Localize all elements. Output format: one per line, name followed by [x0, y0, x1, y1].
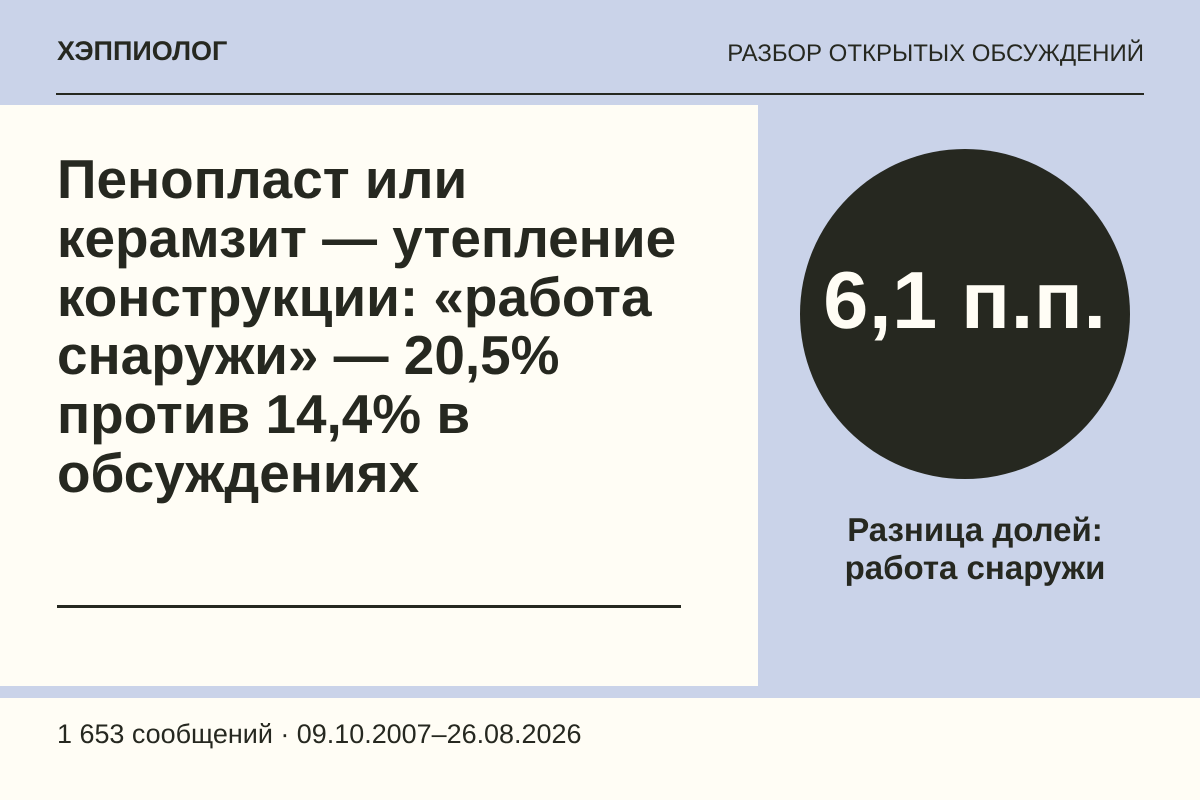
title: Пенопласт или — [57, 148, 467, 210]
callout caption — [845, 511, 1105, 586]
header: brand name: ХЭППИОЛОГ — [57, 36, 227, 66]
footer band — [0, 698, 1200, 800]
callout caption: Разница долей: — [847, 511, 1103, 548]
header: section label: РАЗБОР ОТКРЫТЫХ ОБСУЖДЕНИЙ — [727, 40, 1144, 67]
title — [57, 148, 676, 504]
callout: difference value circle: 6,1 п.п. — [823, 256, 1107, 346]
callout caption: работа снаружи — [845, 549, 1105, 586]
panel: main title — [0, 105, 758, 686]
callout: difference value circle — [800, 149, 1130, 479]
title: обсуждениях — [57, 442, 419, 504]
title: против 14,4% в — [57, 383, 470, 445]
title: снаружи» — 20,5% — [57, 324, 559, 386]
footer: message count and dates: 1 653 сообщений · 09.10.2007–26.08.2026 — [57, 719, 581, 749]
title: керамзит — утепление — [57, 207, 676, 269]
title: конструкции: «работа — [57, 266, 651, 328]
